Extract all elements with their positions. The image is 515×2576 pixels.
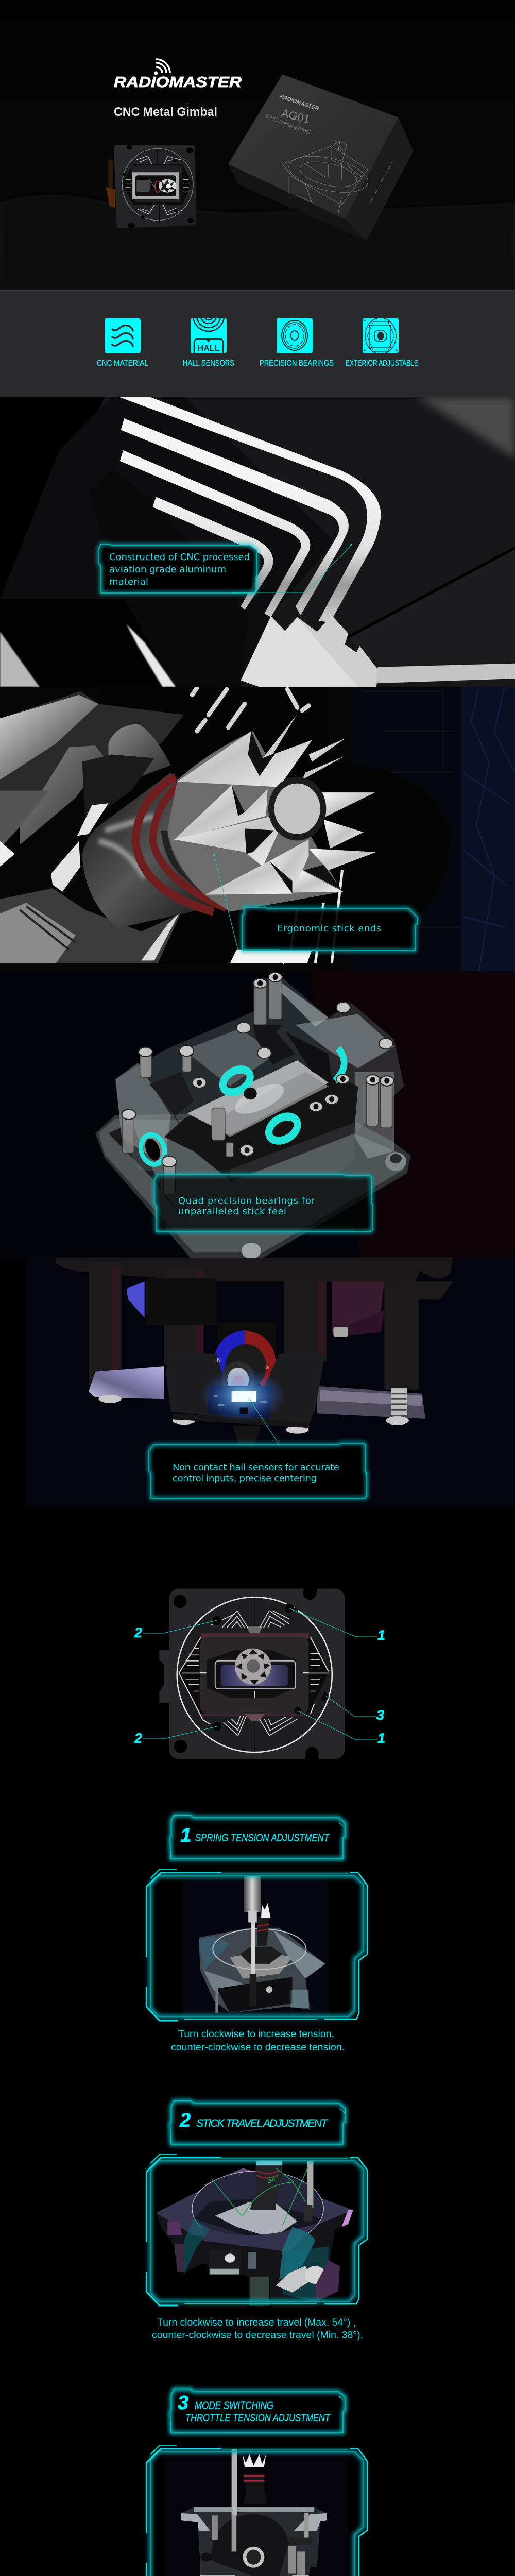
logo: Radiomaster [114,59,242,91]
callout: CNC material: aviation grade aluminum [109,564,226,575]
icon: precision bearings [277,318,313,353]
transparent housing [115,978,404,1177]
housing [181,2507,327,2576]
callout lines and numbers: 2 [134,1731,142,1746]
black yoke [149,1025,358,1182]
screws [122,973,394,1195]
callout: hall sensors: control inputs, precise centering [173,1473,317,1484]
magnet pole labels: S [265,1365,269,1371]
flange [156,2168,353,2306]
icon: Hall sensors [191,318,227,353]
callout: ergonomic stick ends: Ergonomic stick ends [277,923,381,934]
stick [250,2160,313,2222]
callout: hall sensors [149,1398,367,1498]
stick crown [235,1649,271,1685]
steel bar [89,1366,164,1399]
callout lines and numbers [134,1608,385,1746]
stick [257,1903,271,1946]
travel angle arcs [212,2165,308,2226]
panel: stick end close-up [0,687,515,971]
product box [228,74,413,241]
callout: CNC material [98,544,352,593]
heading: stick travel adjustment: STICK TRAVEL ADJUSTMENT [196,2117,329,2129]
red O-rings [135,777,227,912]
posts [89,1263,453,1390]
caption: stick travel [152,2317,363,2341]
base plate [95,1112,410,1258]
adjustment screws [212,1603,329,1731]
heading: mode switching and throttle tension: THROTTLE TENSION ADJUSTMENT [185,2412,331,2424]
silver base pieces [241,615,380,687]
feature labels: CNC MATERIAL [97,358,148,368]
stick body [82,773,214,926]
callout: quad precision bearings: unparalleled stick feel [178,1206,286,1217]
callout: hall sensors: Non contact hall sensors for accurate [173,1462,339,1473]
white rails near callout [282,870,342,963]
panel: quad precision bearings [0,971,515,1259]
silver housing [0,691,184,791]
glowing bearings [136,1048,344,1168]
black hall block [166,1354,325,1426]
title: CNC Metal Gimbal: CNC Metal Gimbal [114,105,217,119]
heading: mode switching and throttle tension: MODE SWITCHING [195,2400,273,2412]
box label text [265,93,320,136]
icon: Hall sensors: HALL [198,344,220,353]
screwdriver [244,1876,261,2007]
icon: CNC material [105,318,141,353]
panel: spring tension image [146,1869,367,2026]
heading: stick travel adjustment: 2 [179,2110,191,2131]
magnet pole labels [217,1358,269,1369]
product gimbal [106,145,196,228]
panel: CNC material close-up [0,397,515,687]
callout: ergonomic stick ends [213,854,417,951]
callout lines and numbers: 3 [376,1707,384,1723]
box label text: AG01 [280,107,311,126]
feature labels: HALL SENSORS [183,358,234,368]
callout lines and numbers: 1 [377,1731,385,1746]
callout lines and numbers: 2 [134,1625,142,1640]
icon: exterior adjustable [363,318,399,354]
callout: quad precision bearings [154,1175,372,1232]
caption: spring tension: counter-clockwise to decrease tension. [171,2042,345,2053]
body [199,1928,325,2013]
pcb and glowing sensor [207,1386,272,1419]
logo: Radiomaster: RADIOMASTER [114,74,242,91]
caption: spring tension: Turn clockwise to increase tension, [178,2029,334,2040]
magnet pole labels: N [217,1357,221,1363]
panel: hero [0,0,515,290]
panel: mode switching image [146,2445,367,2576]
stick [232,2449,268,2515]
heading: spring tension adjustment: 1 [180,1824,192,1846]
heading: spring tension adjustment [170,1816,345,1859]
heading: mode switching and throttle tension: 3 [178,2392,188,2414]
panel: adjustment screw diagram [134,1587,385,1760]
box label text: RADIOMASTER [279,93,320,112]
label: 54 degrees: 54° [266,2174,280,2185]
caption: spring tension [171,2029,345,2053]
feature labels [97,358,418,368]
heading: mode switching and throttle tension [170,2389,345,2433]
heading: spring tension adjustment: SPRING TENSION ADJUSTMENT [195,1832,330,1844]
gimbal top view [159,1587,345,1760]
caption: stick travel: counter-clockwise to decrease travel (Min. 38°). [152,2330,363,2341]
magnet [215,1330,276,1386]
callout: quad precision bearings: Quad precision bearings for [178,1195,316,1207]
feature labels: EXTERIOR ADJUSTABLE [346,358,418,368]
top plate [55,1258,453,1289]
callout: CNC material: Constructed of CNC processed [109,552,250,563]
callout: CNC material: material [109,577,148,587]
caption: stick travel: Turn clockwise to increase travel (Max. 54°) , [157,2317,356,2328]
panel: hall sensors [26,1258,515,1507]
crown head [161,714,376,912]
milled silver stripes [118,397,381,622]
feature labels: PRECISION BEARINGS [260,358,334,368]
heading: stick travel adjustment [170,2101,345,2144]
panel: stick travel image [146,2155,367,2306]
box label text: CNC metal gimbal [265,112,312,136]
panel: feature band [0,290,515,397]
milled chevrons [182,1611,329,1736]
callout lines and numbers: 1 [377,1628,385,1643]
